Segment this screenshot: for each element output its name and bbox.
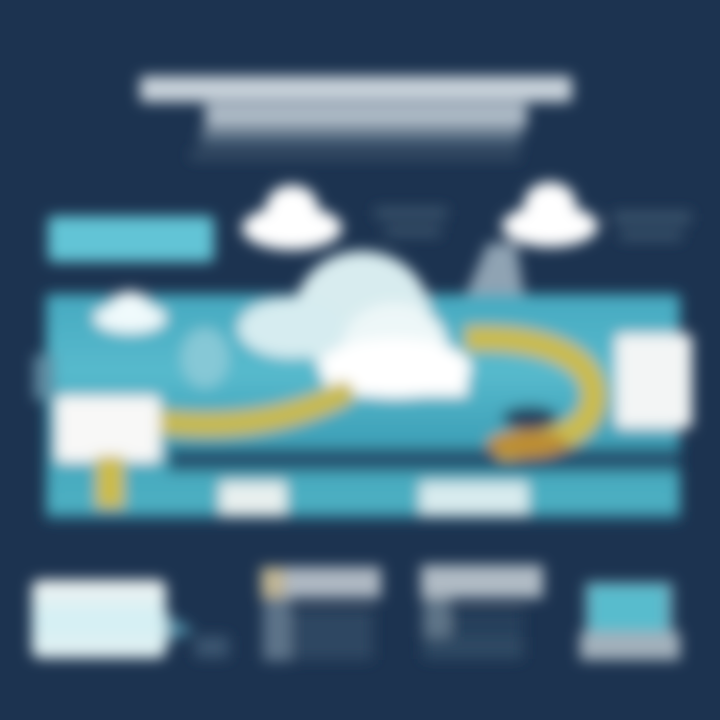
panel: bottom left cloud card <box>32 580 194 658</box>
icon: grey tower <box>466 243 524 294</box>
arrow: right gold loop <box>465 339 594 447</box>
icon: top left cloud <box>242 185 342 250</box>
central large cloud <box>238 251 471 398</box>
panel: dark lower strip <box>168 447 680 472</box>
faint caption <box>195 636 229 658</box>
icon: top right cloud <box>502 182 598 247</box>
arrow: left gold curve <box>160 394 342 424</box>
panel: right white card <box>616 334 692 428</box>
icon: small cloud <box>94 291 166 333</box>
icon: bottom right laptop <box>580 582 680 660</box>
title <box>140 76 572 159</box>
bottom band labels <box>220 482 528 514</box>
text block: bottom middle left <box>261 567 381 661</box>
icon: faint circle <box>181 328 229 388</box>
top left label pill <box>48 216 214 262</box>
text block: bottom middle right <box>421 565 543 659</box>
icon: orange base <box>487 406 567 458</box>
arrow: gold down connector <box>96 456 124 508</box>
panel: left white card <box>56 396 160 462</box>
panel: main teal band <box>34 294 680 520</box>
top side captions <box>375 208 691 240</box>
